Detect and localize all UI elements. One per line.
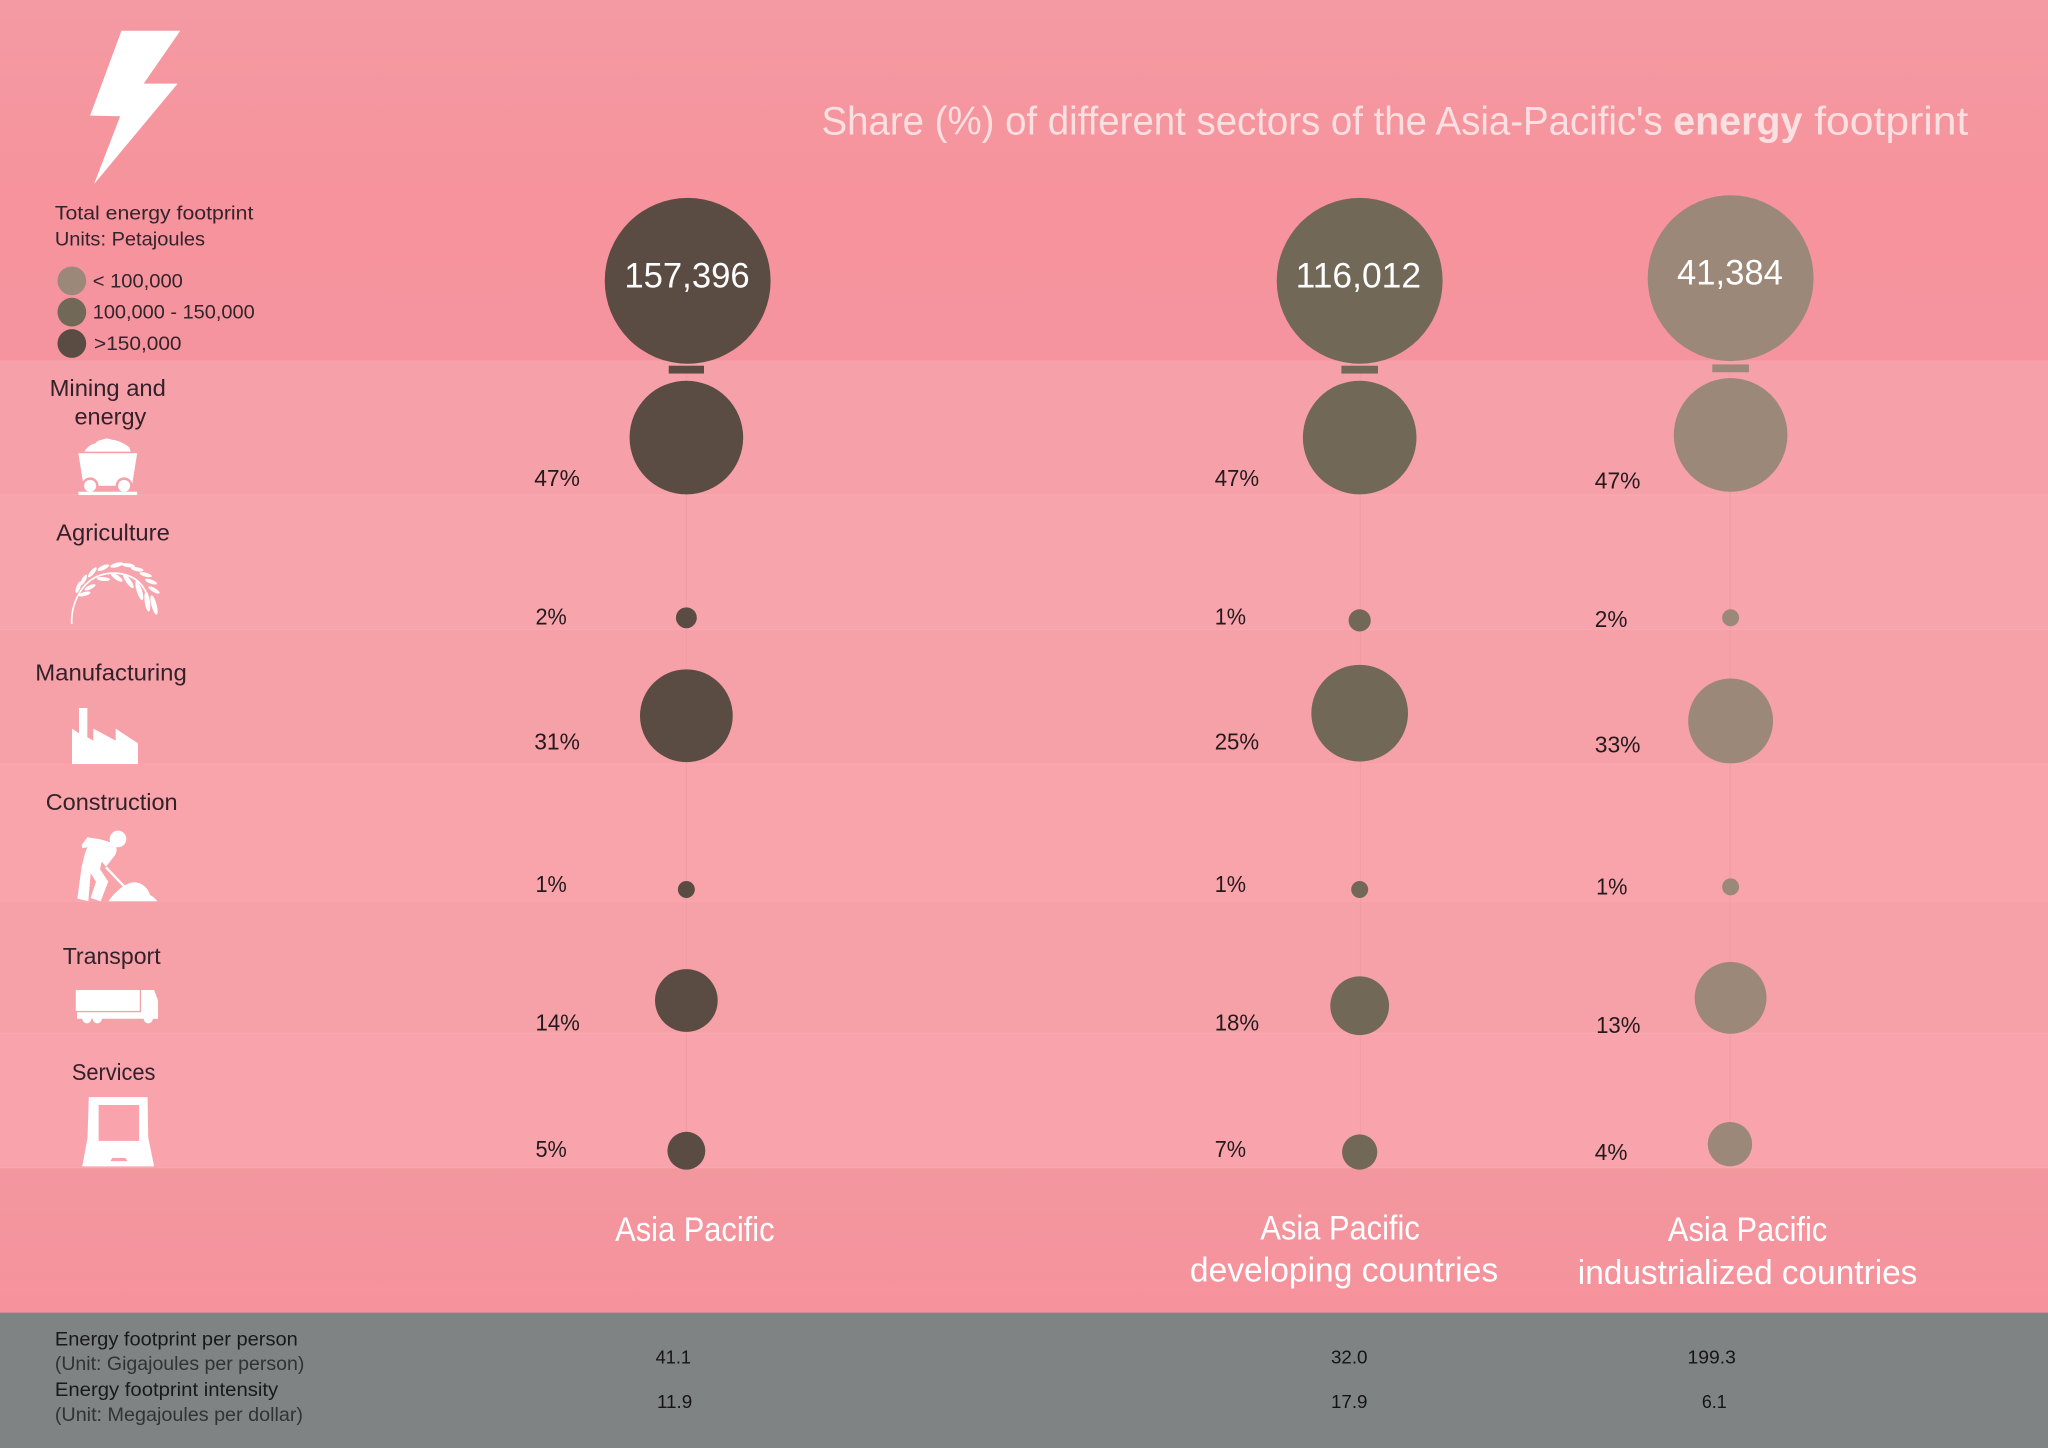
panel: per-person statistics band	[0, 1313, 2048, 1448]
legend: total energy footprint	[55, 202, 255, 358]
stat values: developing countries	[1331, 1347, 1368, 1412]
sector: agriculture	[56, 520, 170, 624]
stat values: Asia Pacific	[656, 1347, 692, 1412]
label: Asia Pacific industrialized countries: Asia Pacific	[1668, 1211, 1827, 1249]
stat labels: Energy footprint intensity	[55, 1379, 278, 1401]
column: developing countries: 47%	[1215, 465, 1259, 491]
sector: services: Services	[72, 1059, 155, 1085]
stat labels: Energy footprint per person	[55, 1328, 298, 1350]
stat values: Asia Pacific: 41.1	[656, 1347, 691, 1368]
column: industrialized countries: 4%	[1595, 1139, 1628, 1165]
column: industrialized countries	[1595, 195, 1814, 1166]
column: Asia Pacific: 14%	[536, 1010, 580, 1036]
column: developing countries: 7%	[1215, 1136, 1246, 1162]
sector: mining and energy: Mining and	[50, 375, 166, 401]
legend: total energy footprint: >150,000	[94, 333, 182, 355]
column: Asia Pacific: 31%	[534, 729, 580, 755]
icon: laptop	[82, 1097, 154, 1166]
column: industrialized countries: 2%	[1595, 606, 1628, 632]
label: Asia Pacific developing countries: developing countries	[1190, 1251, 1498, 1289]
legend: total energy footprint: 100,000 - 150,000	[93, 302, 255, 324]
total bubble: developing countries	[1277, 198, 1443, 364]
band: services row	[0, 1033, 2048, 1168]
column: Asia Pacific: 47%	[534, 465, 580, 491]
label: Asia Pacific developing countries: Asia Pacific	[1260, 1210, 1420, 1248]
column: developing countries	[1215, 198, 1443, 1170]
label: Asia Pacific developing countries	[1190, 1210, 1498, 1289]
icon: truck	[76, 990, 158, 1023]
band: construction row	[0, 764, 2048, 901]
stat labels: (Unit: Megajoules per dollar)	[55, 1404, 303, 1426]
stat values: industrialized countries: 6.1	[1702, 1391, 1727, 1412]
stat values: developing countries: 17.9	[1331, 1391, 1368, 1412]
stat values: Asia Pacific: 11.9	[657, 1391, 692, 1412]
label: Asia Pacific industrialized countries	[1578, 1211, 1917, 1292]
label: Asia Pacific: Asia Pacific	[615, 1211, 775, 1249]
icon: wheat stalk	[72, 561, 160, 624]
legend: total energy footprint: Total energy footprint	[55, 202, 254, 224]
band: transport row	[0, 901, 2048, 1033]
column: developing countries: 1%	[1215, 871, 1246, 897]
stat labels	[55, 1328, 304, 1426]
sector: construction: Construction	[46, 789, 178, 815]
total bubble: Asia Pacific: 157,396	[624, 256, 750, 295]
column: industrialized countries: 33%	[1595, 731, 1641, 757]
column: Asia Pacific: 1%	[536, 871, 567, 897]
sector: construction	[46, 789, 178, 901]
sector: mining and energy: energy	[74, 403, 147, 429]
sector: manufacturing	[35, 659, 187, 764]
icon: mine cart	[78, 438, 137, 495]
column: developing countries: 25%	[1215, 729, 1259, 755]
total bubble: industrialized countries	[1648, 195, 1814, 361]
sector: services	[72, 1059, 155, 1166]
icon: lightning bolt	[90, 31, 180, 184]
title: footprint	[1814, 100, 1968, 144]
legend: total energy footprint: Units: Petajoules	[55, 229, 205, 251]
column: Asia Pacific: 5%	[536, 1136, 567, 1162]
panel: region names band	[0, 1168, 2048, 1313]
sector: manufacturing: Manufacturing	[35, 659, 187, 685]
band: mining and energy row	[0, 360, 2048, 495]
sector: transport	[63, 943, 161, 1023]
stat labels: (Unit: Gigajoules per person)	[55, 1353, 304, 1375]
column: Asia Pacific	[534, 198, 771, 1170]
column: Asia Pacific: 2%	[536, 603, 567, 629]
title: energy	[1673, 100, 1802, 144]
icon: worker shovelling	[77, 831, 157, 901]
total bubble: Asia Pacific	[605, 198, 771, 364]
stat values: industrialized countries	[1688, 1347, 1736, 1412]
legend: total energy footprint: < 100,000	[93, 270, 183, 292]
column: developing countries: 1%	[1215, 603, 1246, 629]
total bubble: industrialized countries: 41,384	[1677, 254, 1783, 293]
label: Asia Pacific industrialized countries: industrialized countries	[1578, 1254, 1917, 1292]
panel: header band	[0, 0, 2048, 360]
title: Share (%) of different sectors of the Asia-Pacific's	[822, 100, 1663, 144]
total bubble: developing countries: 116,012	[1296, 256, 1421, 295]
icon: factory	[72, 708, 138, 764]
column: industrialized countries: 13%	[1596, 1012, 1641, 1038]
band: agriculture row	[0, 495, 2048, 630]
stat values: developing countries: 32.0	[1331, 1347, 1368, 1368]
band: manufacturing row	[0, 630, 2048, 764]
column: developing countries: 18%	[1215, 1010, 1259, 1036]
sector: agriculture: Agriculture	[56, 520, 170, 546]
sector: transport: Transport	[63, 943, 161, 969]
column: industrialized countries: 1%	[1596, 874, 1628, 900]
column: industrialized countries: 47%	[1595, 467, 1641, 493]
stat values: industrialized countries: 199.3	[1688, 1347, 1736, 1368]
sector: mining and energy	[50, 375, 166, 495]
